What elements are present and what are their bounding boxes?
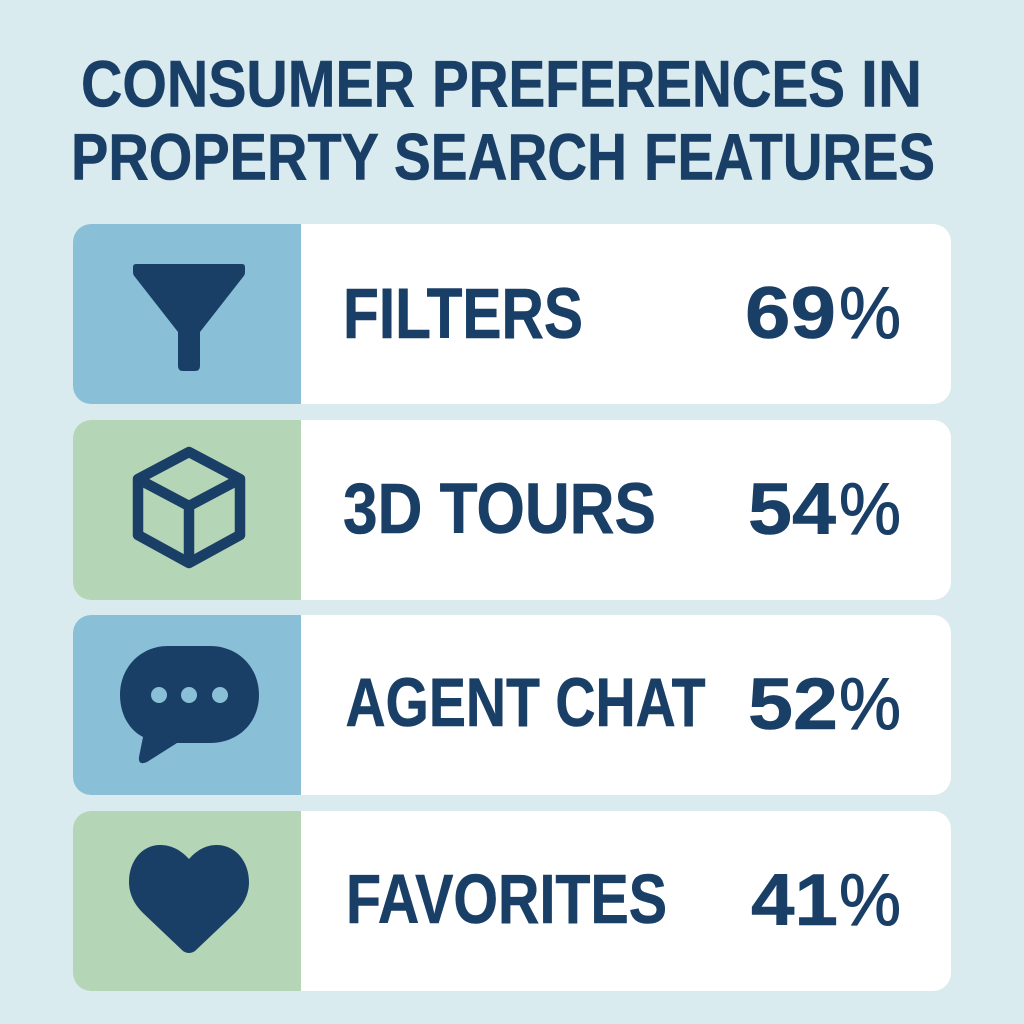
icon: cube xyxy=(138,452,240,563)
title xyxy=(71,47,935,193)
value: favorites: 41 xyxy=(751,860,838,941)
icon: speech bubble xyxy=(120,646,259,763)
label: favorites: FAVORITES xyxy=(346,860,667,938)
label: 3d tours: 3D TOURS xyxy=(343,470,656,549)
title: PROPERTY xyxy=(71,119,379,193)
value: filters: % xyxy=(839,273,901,354)
icon dots xyxy=(151,687,228,703)
value: filters xyxy=(745,273,901,354)
value: favorites: % xyxy=(839,860,901,941)
value: 3d tours: 54 xyxy=(748,469,836,550)
icon: funnel xyxy=(133,264,245,371)
label: filters: FILTERS xyxy=(343,275,583,354)
value: agent chat xyxy=(748,664,901,745)
label: agent chat: AGENT CHAT xyxy=(346,664,706,741)
value: 3d tours: % xyxy=(839,469,901,550)
value: 3d tours xyxy=(748,469,901,550)
panel: agent chat xyxy=(73,615,951,795)
title: PREFERENCES xyxy=(432,47,845,121)
panel: favorites xyxy=(73,811,951,991)
panel: 3d tours xyxy=(73,420,951,600)
title: SEARCH xyxy=(394,119,627,193)
title: FEATURES xyxy=(644,119,935,193)
icon: heart xyxy=(129,845,249,953)
value: agent chat: 52 xyxy=(748,664,838,745)
title: CONSUMER xyxy=(81,47,415,121)
panel: filters xyxy=(73,224,951,404)
value: agent chat: % xyxy=(839,664,901,745)
title: IN xyxy=(861,47,922,121)
value: favorites xyxy=(751,860,901,941)
value: filters: 69 xyxy=(745,273,836,354)
